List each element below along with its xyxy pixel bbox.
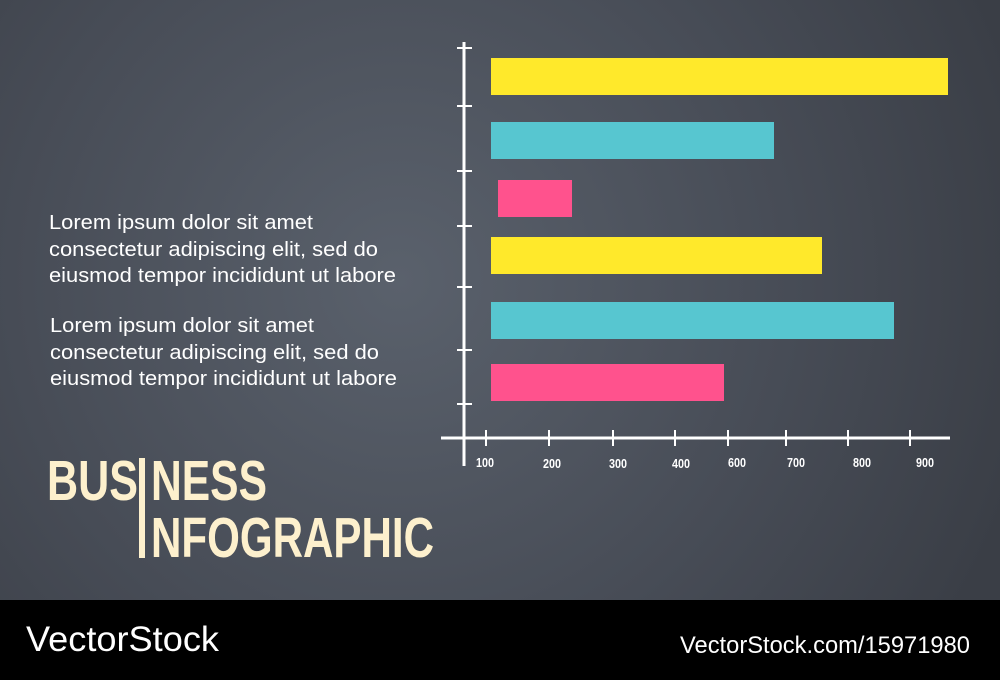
axis labels: 600 [728, 455, 746, 470]
text block 2: eiusmod tempor incididunt ut labore [50, 368, 397, 390]
text block 2: Lorem ipsum dolor sit amet [50, 315, 314, 337]
axis labels: 400 [672, 456, 690, 471]
axis labels: 800 [853, 455, 871, 470]
footer: VectorStock [26, 620, 220, 659]
axis labels [476, 455, 934, 471]
footer: VectorStock.com/15971980 [680, 632, 970, 659]
title: NESS [151, 449, 267, 513]
axes [441, 42, 950, 466]
axis labels: 900 [916, 455, 934, 470]
axis labels: 200 [543, 456, 561, 471]
bar chart [441, 42, 950, 471]
footer [0, 600, 1000, 680]
axis labels: 300 [609, 456, 627, 471]
text block 2: consectetur adipiscing elit, sed do [50, 342, 379, 364]
title [47, 449, 434, 570]
bars [491, 58, 948, 401]
text block 1: consectetur adipiscing elit, sed do [49, 239, 378, 261]
text block 1 [49, 212, 396, 287]
text block 1: eiusmod tempor incididunt ut labore [49, 265, 396, 287]
title: NFOGRAPHIC [151, 506, 434, 570]
text block 2 [50, 315, 397, 390]
axis labels: 100 [476, 455, 494, 470]
axis labels: 700 [787, 455, 805, 470]
title: BUS [47, 449, 138, 513]
text block 1: Lorem ipsum dolor sit amet [49, 212, 313, 234]
